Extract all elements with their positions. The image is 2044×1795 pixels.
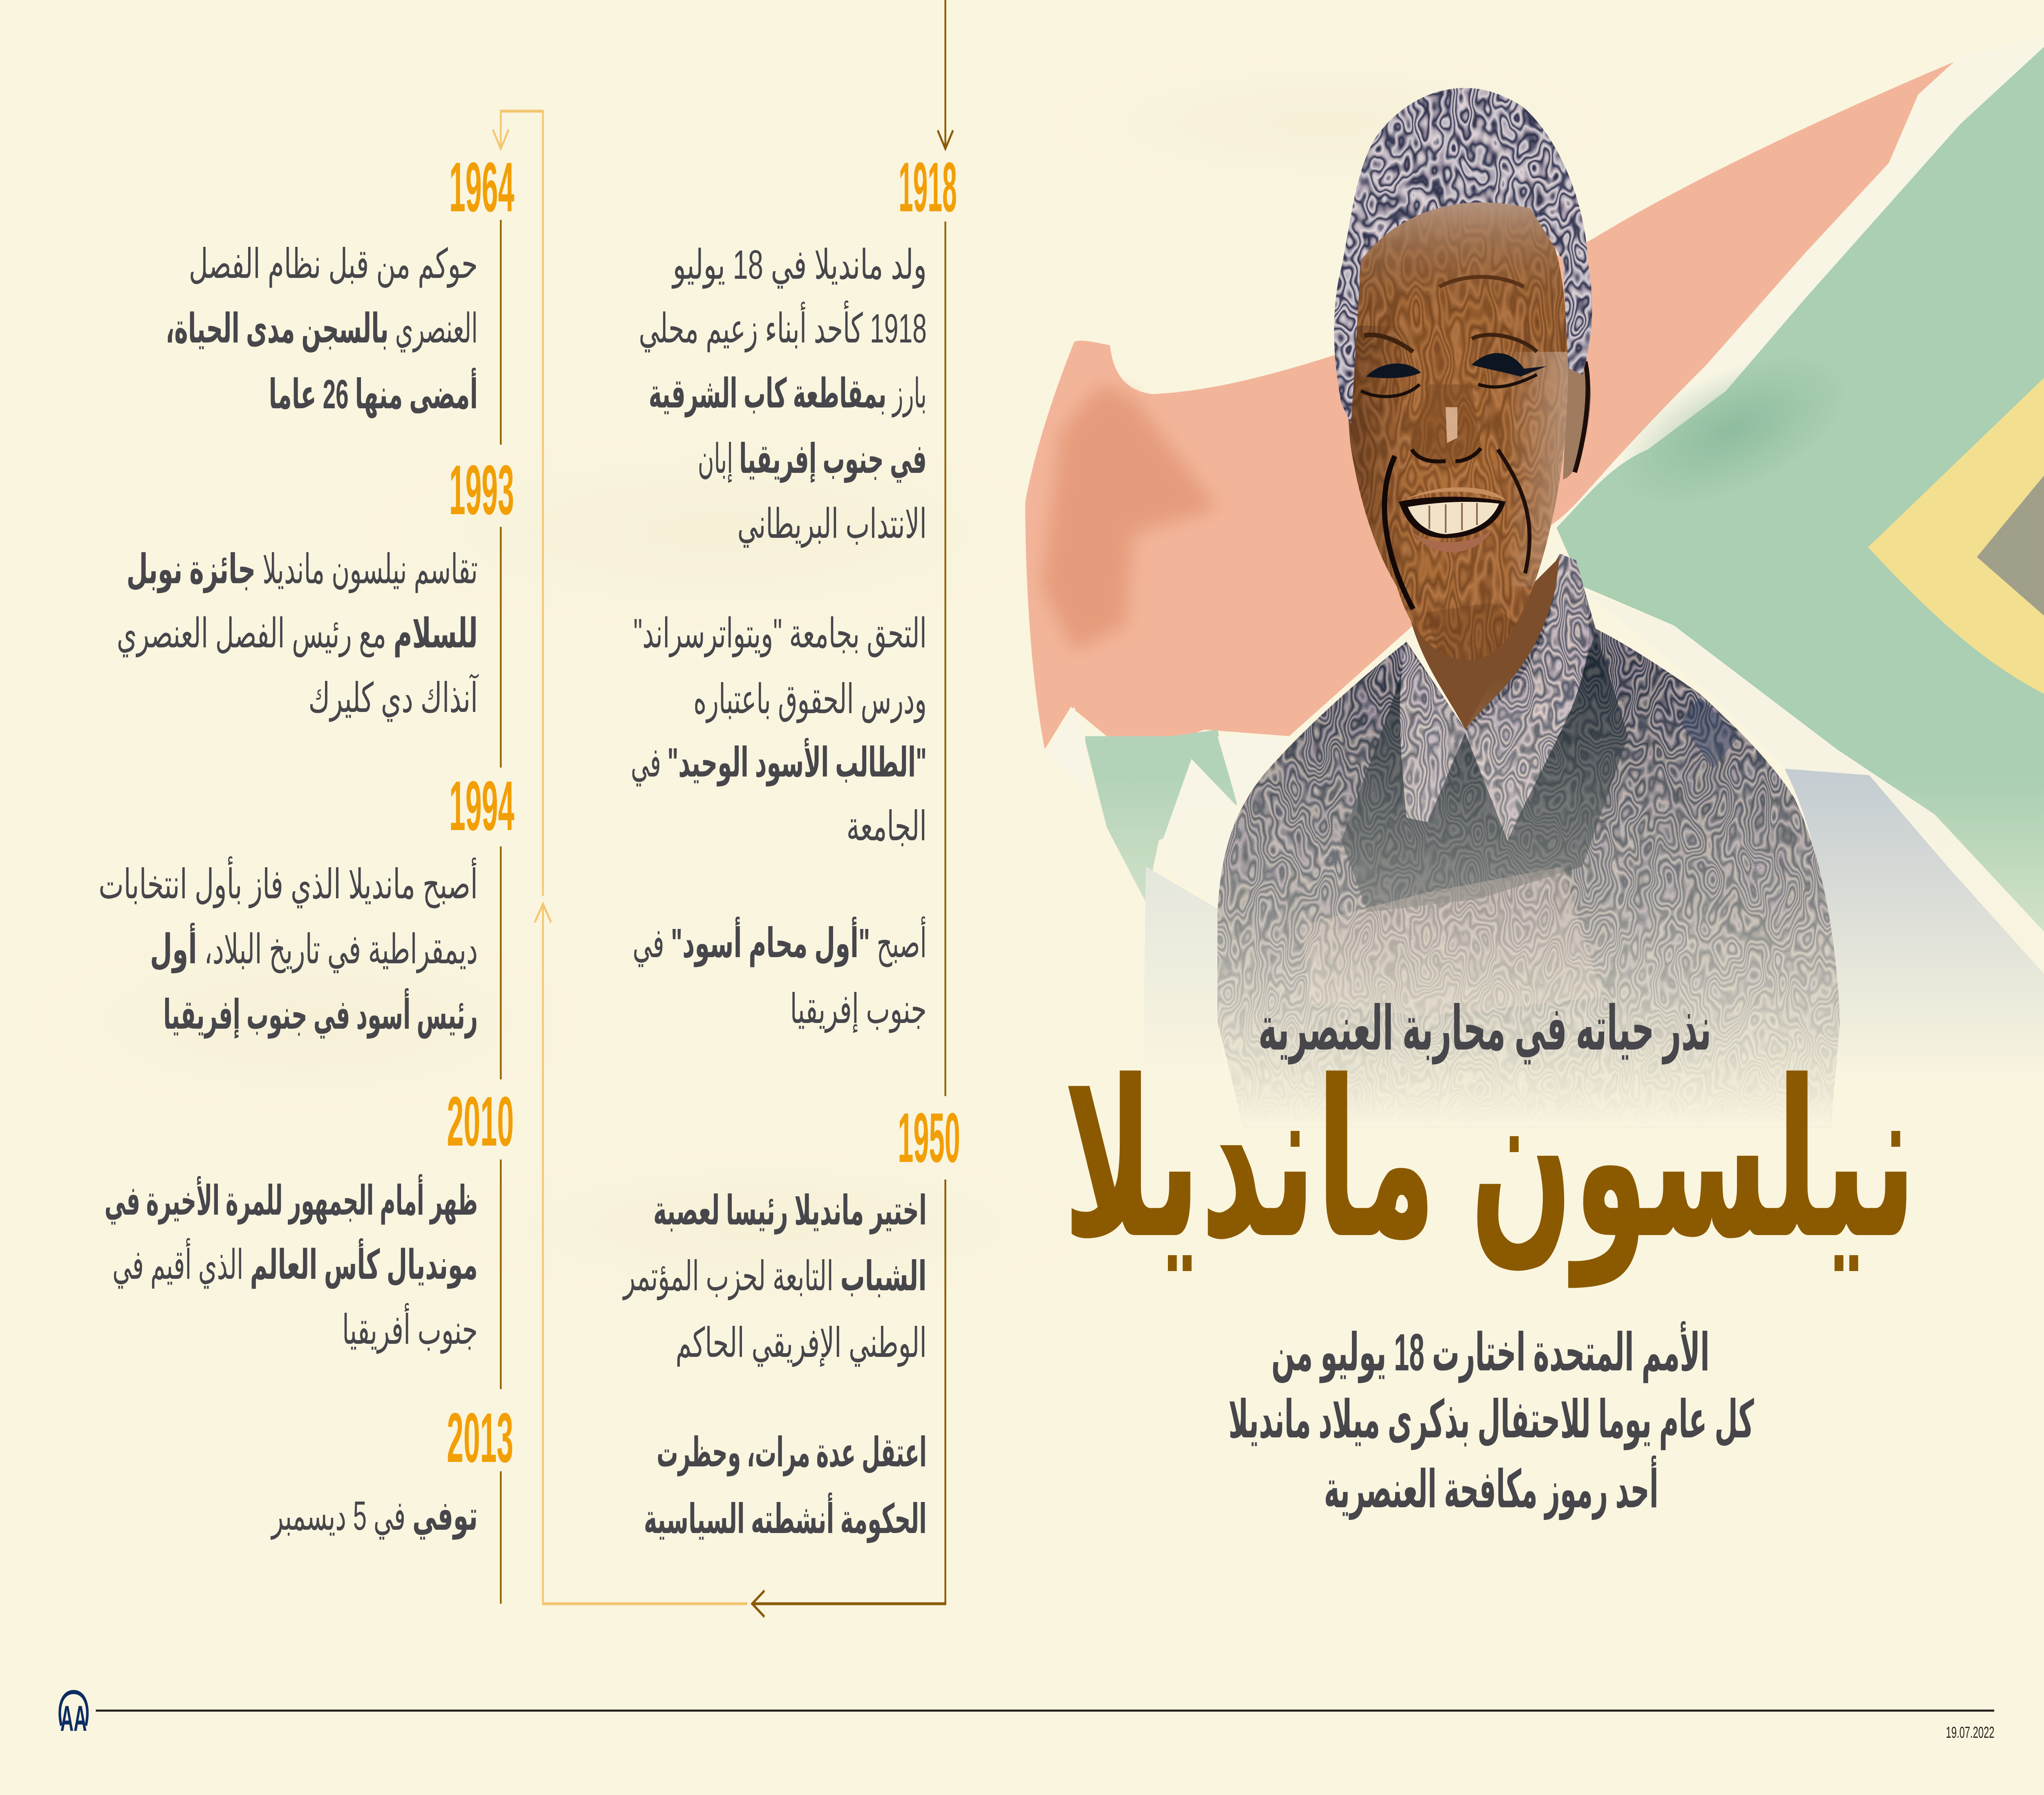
flag green shadow bbox=[1596, 325, 1869, 535]
text block: 2010: ظهر أمام الجمهور للمرة الأخيرة في bbox=[105, 1174, 478, 1225]
portrait shirt fade bbox=[1201, 674, 1865, 1128]
subtitle: نذر حياته في محاربة العنصرية bbox=[1258, 994, 1711, 1065]
text block: 1964: حوكم من قبل نظام الفصل bbox=[189, 241, 478, 288]
text block: 1994: ديمقراطية في تاريخ البلاد، أول bbox=[150, 922, 478, 974]
text block: arrests: الحكومة أنشطته السياسية bbox=[644, 1492, 927, 1543]
flag black triangle bbox=[1977, 476, 2044, 615]
portrait face bbox=[1329, 163, 1623, 736]
South African flag background bbox=[1022, 36, 2044, 1124]
text block: 1950 youth league: اختير مانديلا رئيسا لعصبة bbox=[653, 1188, 927, 1235]
text block: university bbox=[631, 611, 927, 849]
year: 1964: 1964 bbox=[449, 148, 514, 226]
timeline line: 1994 bbox=[500, 846, 502, 1079]
text block: university: التحق بجامعة "ويتواترسراند" bbox=[633, 611, 927, 658]
flag red band bbox=[1025, 62, 1954, 749]
text block: 1918 birth: 1918 كأحد أبناء زعيم محلي bbox=[639, 300, 927, 353]
year: 2013: 2013 bbox=[447, 1399, 513, 1477]
text block: arrests bbox=[644, 1430, 927, 1543]
text block: 1950 youth league bbox=[622, 1188, 927, 1367]
flag green band bbox=[1556, 47, 2044, 931]
description: أحد رموز مكافحة العنصرية bbox=[1324, 1455, 1659, 1520]
text block: first black lawyer: جنوب إفريقيا bbox=[790, 986, 927, 1033]
flag yellow band bbox=[1868, 378, 2044, 694]
portrait hair bbox=[1316, 74, 1610, 441]
description: الأمم المتحدة اختارت 18 يوليو من bbox=[1271, 1321, 1710, 1383]
description: كل عام يوما للاحتفال بذكرى ميلاد مانديلا bbox=[1228, 1390, 1754, 1450]
timeline line: 1964 bbox=[500, 220, 502, 445]
arrow: return line upward bbox=[535, 904, 747, 1604]
text block: 1918 birth: الانتداب البريطاني bbox=[737, 501, 927, 548]
text block: 1950 youth league: الشباب التابعة لحزب المؤتمر bbox=[622, 1253, 927, 1300]
year: 1950: 1950 bbox=[898, 1099, 960, 1177]
flag lower-left white folds bbox=[1047, 707, 1291, 909]
year: 1918: 1918 bbox=[899, 148, 957, 226]
portrait shirt bbox=[1201, 552, 1865, 1144]
text block: 1964: أمضى منها 26 عاما bbox=[269, 367, 478, 419]
text block: university: الجامعة bbox=[847, 803, 927, 849]
timeline line: 2010 bbox=[500, 1159, 502, 1389]
text block: 1918 birth: بارز بمقاطعة كاب الشرقية bbox=[649, 371, 927, 418]
flag white band bottom bbox=[1582, 590, 2044, 974]
year: 1993: 1993 bbox=[449, 451, 514, 529]
text block: 1950 youth league: الوطني الإفريقي الحاكم bbox=[675, 1320, 927, 1367]
text block: 1918 birth: في جنوب إفريقيا إبان bbox=[698, 436, 927, 483]
text block: 2010 bbox=[105, 1174, 478, 1354]
text block: 1994 bbox=[99, 856, 478, 1039]
text block: 1993: تقاسم نيلسون مانديلا جائزة نوبل bbox=[126, 546, 478, 593]
text block: 1994: أصبح مانديلا الذي فاز بأول انتخابات bbox=[99, 856, 478, 909]
portrait of Nelson Mandela bbox=[1201, 74, 1865, 1144]
icon: AA logo: AA bbox=[61, 1699, 87, 1739]
timeline connector lines and arrows bbox=[493, 0, 953, 1617]
timeline line: 1993 bbox=[500, 527, 502, 768]
footer rule bbox=[96, 1710, 1994, 1712]
arrow: into 1918 bbox=[938, 0, 953, 149]
date: 19.07.2022 bbox=[1946, 1723, 1995, 1741]
arrow: into 1964 bbox=[493, 111, 543, 896]
text block: university: "الطالب الأسود الوحيد" في bbox=[631, 738, 927, 787]
flag lower-left green fold bbox=[1084, 730, 1237, 902]
text block: first black lawyer bbox=[632, 916, 927, 1033]
text block: 2010: مونديال كأس العالم الذي أقيم في bbox=[112, 1238, 478, 1289]
text block: first black lawyer: أصبح "أول محام أسود" في bbox=[632, 916, 927, 967]
flag red shadow bbox=[1042, 384, 1217, 651]
text block: 2013: توفي في 5 ديسمبر bbox=[271, 1493, 478, 1540]
timeline line: 2013 bbox=[500, 1471, 502, 1604]
text block: 1994: رئيس أسود في جنوب إفريقيا bbox=[163, 988, 478, 1039]
year: 2010: 2010 bbox=[447, 1082, 514, 1161]
portrait neck bbox=[1403, 554, 1563, 730]
text block: 1964: العنصري بالسجن مدى الحياة، bbox=[166, 306, 478, 353]
portrait facial features bbox=[1361, 277, 1546, 609]
text block: arrests: اعتقل عدة مرات، وحظرت bbox=[657, 1430, 927, 1477]
timeline line: 1918 bbox=[944, 222, 947, 1096]
portrait collar bbox=[1380, 552, 1610, 846]
flag fade to paper bbox=[1022, 777, 2044, 1124]
main title: نيلسون مانديلا bbox=[1063, 1039, 1916, 1289]
flag white band top bbox=[1569, 36, 2044, 515]
portrait ear bbox=[1563, 362, 1591, 479]
text block: university: ودرس الحقوق باعتباره bbox=[693, 676, 927, 723]
text block: 1918 birth bbox=[639, 242, 927, 548]
description bbox=[1228, 1321, 1754, 1520]
text block: 1993 bbox=[117, 546, 479, 722]
text block: 1993: للسلام مع رئيس الفصل العنصري bbox=[117, 611, 478, 658]
text block: 2010: جنوب أفريقيا bbox=[342, 1303, 478, 1354]
text block: 1964 bbox=[166, 241, 478, 419]
text block: 1993: آنذاك دي كليرك bbox=[308, 674, 479, 722]
text block: 1918 birth: ولد مانديلا في 18 يوليو bbox=[671, 242, 927, 289]
arrow: 1950 to return line bbox=[752, 1180, 945, 1617]
flag lower-left blue fold bbox=[1143, 866, 1224, 1108]
year: 1994: 1994 bbox=[449, 767, 514, 845]
flag blue band bbox=[1784, 769, 2044, 1108]
